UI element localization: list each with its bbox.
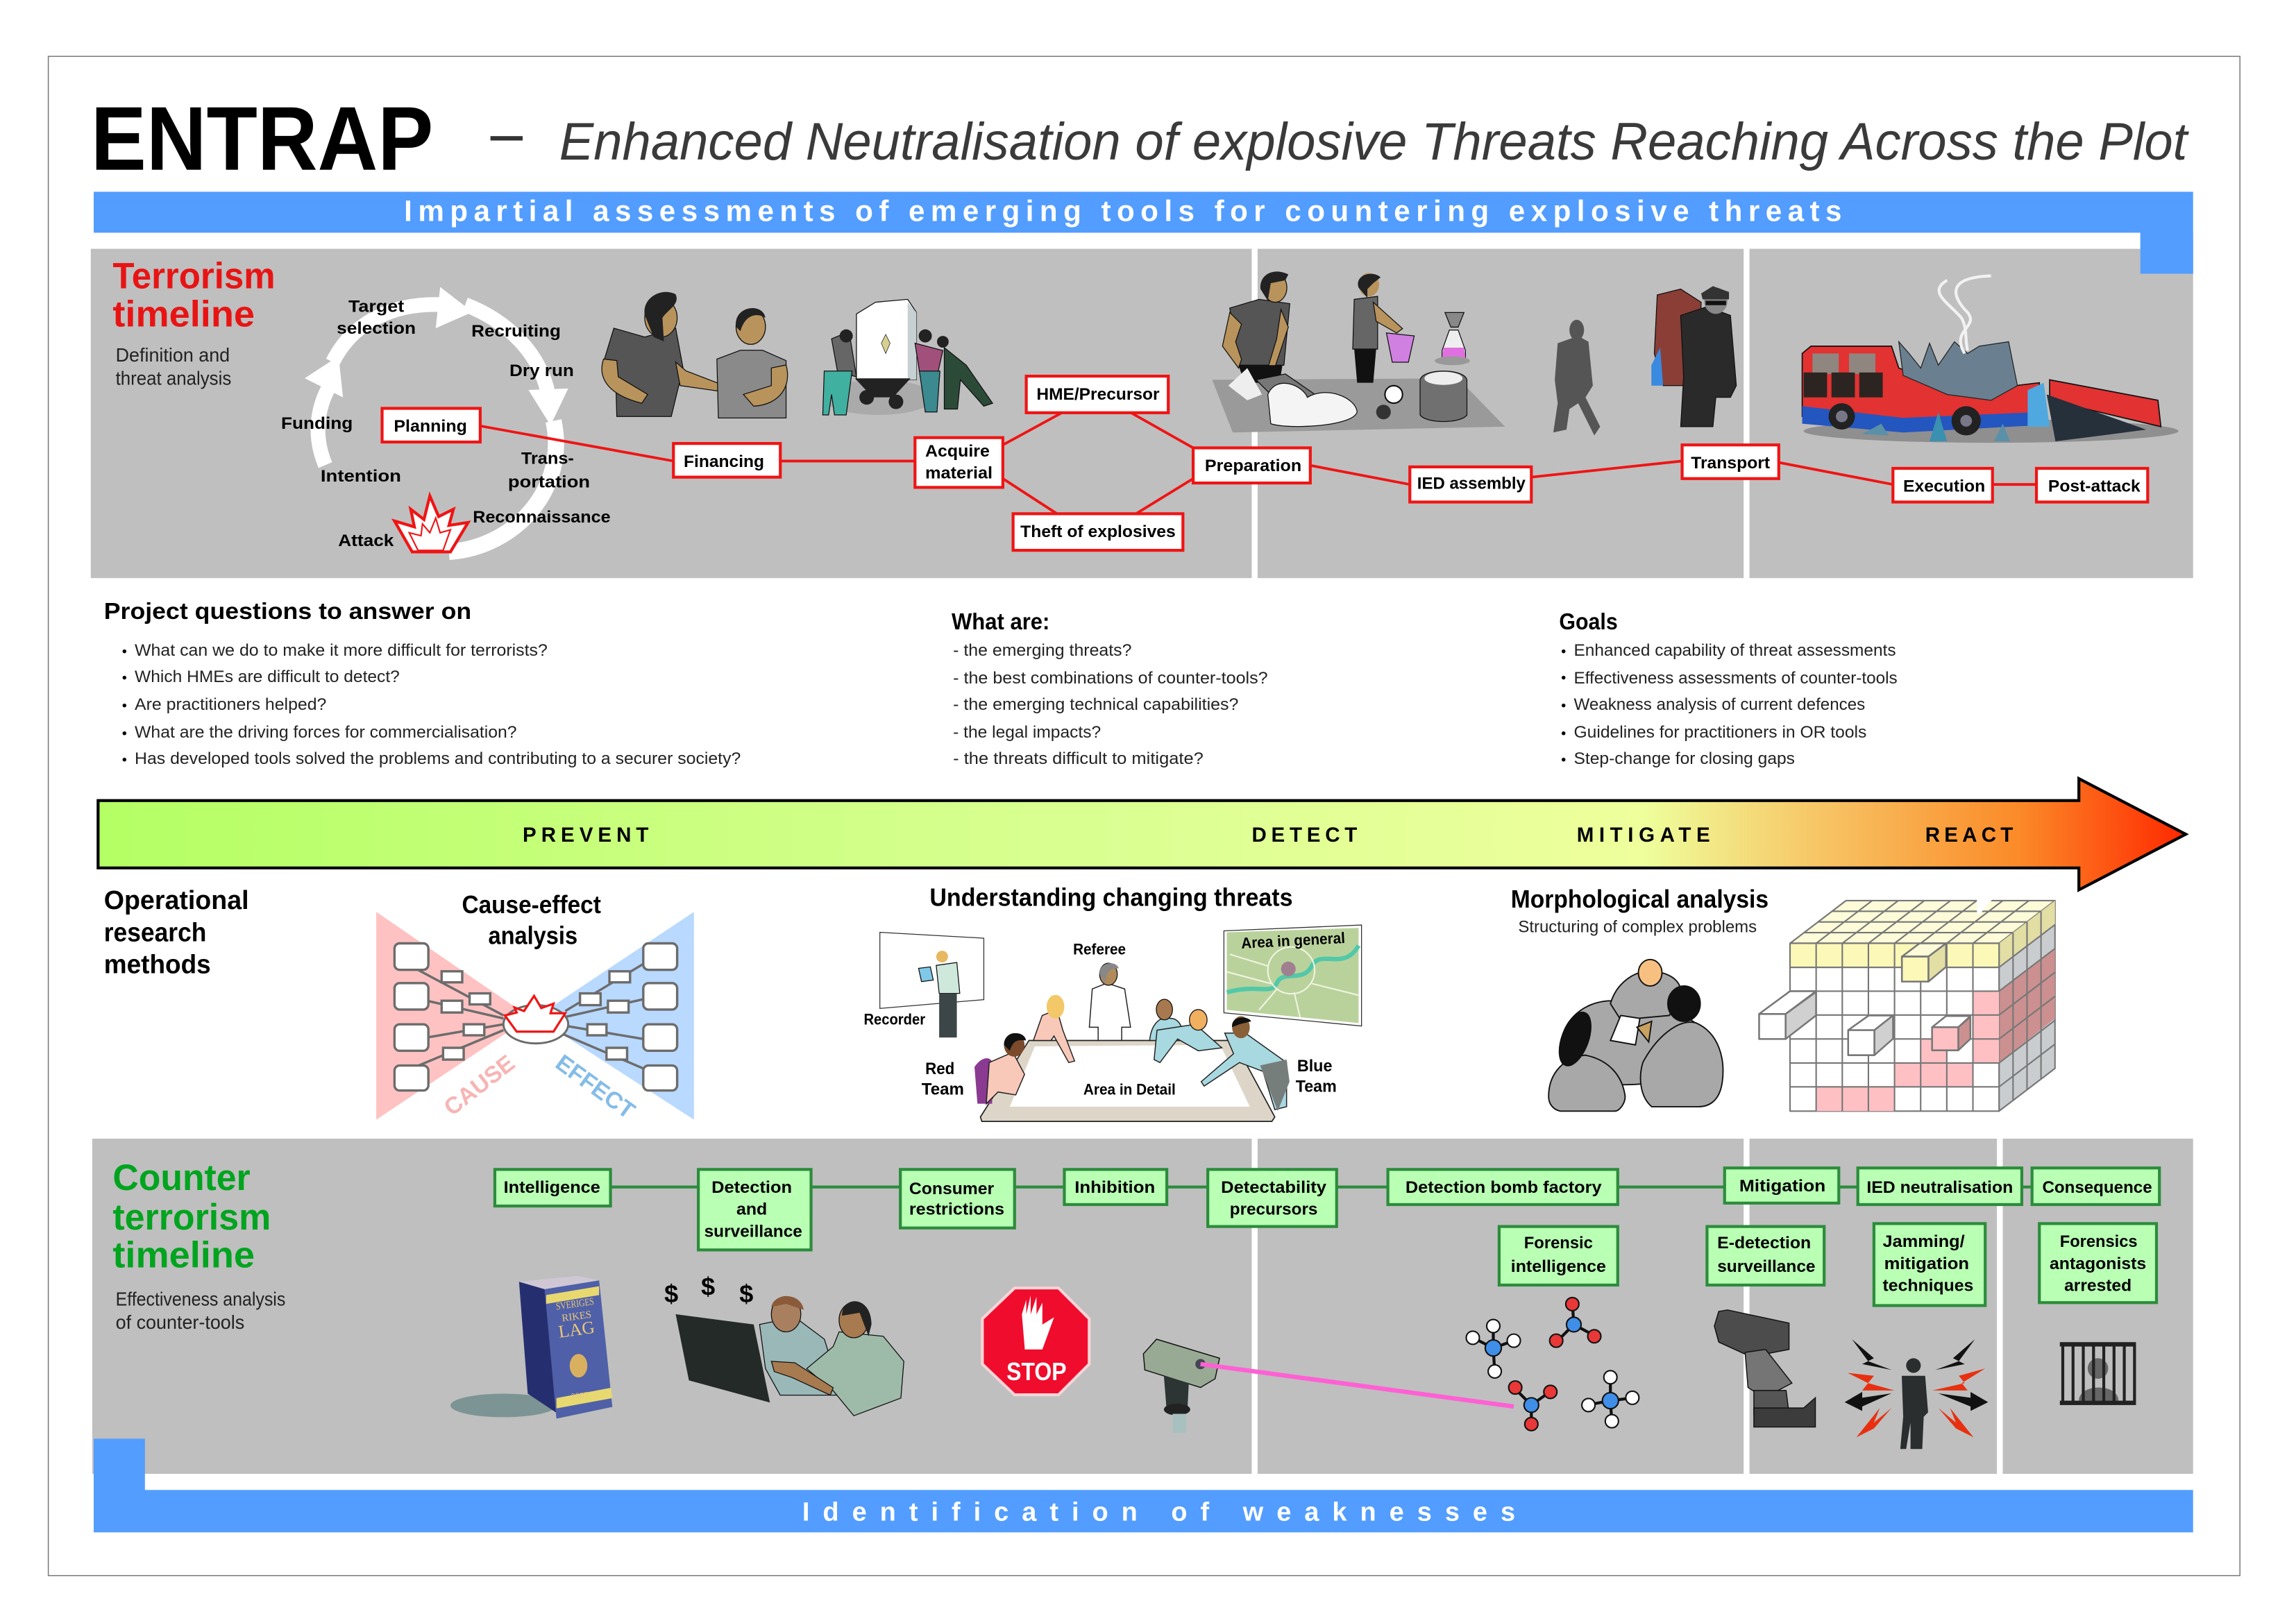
cycle labels: [281, 297, 611, 550]
heading: morphological analysis: [1511, 885, 1769, 937]
red team figures: Red: [925, 1060, 954, 1078]
box: Acquire material: material: [925, 464, 993, 483]
illustration: jamming silhouette with bolts: [1845, 1339, 1988, 1449]
heading: operational research methods: methods: [104, 951, 211, 980]
text: what are: - the emerging technical capabilities?: [953, 695, 1238, 714]
box: Jamming mitigation techniques: [1874, 1223, 1985, 1305]
box: Detection and surveillance: Detection: [711, 1178, 792, 1197]
box: Mitigation: [1725, 1168, 1839, 1203]
illustration: man with backpack: [1651, 286, 1737, 427]
cycle labels: Attack: [338, 532, 394, 550]
box: Execution: [1893, 468, 1993, 502]
cycle labels: Recruiting: [471, 322, 561, 341]
panel: counter terrorism timeline: [92, 1139, 2193, 1474]
diagram: cause-effect bowtie: [376, 891, 694, 1125]
title dash: [491, 136, 523, 140]
panel: terrorism timeline: [91, 232, 2193, 578]
text: project questions: Has developed tools solved the problems and contributing to a securer society?: [135, 749, 741, 768]
cycle labels: Intention: [321, 467, 401, 486]
heading: morphological analysis: Morphological analysis: [1511, 885, 1769, 913]
illustration: bombed bus: [1803, 276, 2179, 443]
text: project questions: What are the driving forces for commercialisation?: [135, 723, 517, 742]
text: goals: Enhanced capability of threat assessments: [1573, 641, 1896, 660]
diagram: terrorist cycle arrows: [305, 287, 568, 552]
box: Consequence: [2032, 1168, 2159, 1205]
text: what are: - the best combinations of counter-tools?: [953, 669, 1268, 688]
arrow: prevent detect mitigate react: PREVENT: [523, 824, 648, 847]
illustration: two men exchanging money: [602, 292, 788, 418]
bottom banner: Identification of weaknesses: [802, 1498, 1515, 1527]
box: IED assembly: [1410, 467, 1531, 502]
heading: counter terrorism timeline: timeline: [112, 1235, 255, 1276]
box: IED neutralisation: IED neutralisation: [1866, 1178, 2013, 1197]
blue team figures: [1149, 999, 1337, 1111]
box: Financing: Financing: [684, 452, 764, 471]
box: Forensics antagonists arrested: Forensics: [2060, 1232, 2138, 1251]
cycle labels: Funding: [281, 414, 353, 433]
box: Transport: [1682, 445, 1779, 479]
box: Mitigation: Mitigation: [1739, 1177, 1825, 1196]
text: goals: Step-change for closing gaps: [1573, 749, 1795, 768]
box: Forensic intelligence: Forensic: [1524, 1234, 1593, 1252]
illustration: men at laptop with dollars: $: [701, 1272, 715, 1300]
referee: [1073, 940, 1131, 1042]
text: project questions: Project questions to answer on: [104, 598, 471, 624]
text: project questions: What can we do to make it more difficult for terrorists?: [135, 641, 548, 660]
diagram: cause-effect bowtie: CAUSE: [439, 1050, 520, 1121]
box: Jamming mitigation techniques: Jamming/: [1883, 1232, 1965, 1251]
text: what are: - the legal impacts?: [953, 723, 1101, 742]
box: Acquire material: Acquire: [925, 442, 990, 461]
illustration: law book: SVERIGES: [555, 1296, 595, 1313]
box: Preparation: Preparation: [1205, 457, 1301, 475]
heading: terrorism timeline: [112, 256, 276, 334]
red team figures: Team: [922, 1080, 964, 1099]
box: Planning: Planning: [394, 417, 467, 436]
cycle labels: Dry run: [509, 362, 574, 380]
box: Jamming mitigation techniques: techniques: [1883, 1276, 1973, 1295]
box: E-detection surveillance: surveillance: [1717, 1257, 1816, 1276]
text: what are: What are:: [952, 609, 1049, 635]
box: HME/Precursor: HME/Precursor: [1036, 385, 1160, 404]
heading: understanding changing threats: Understanding changing threats: [929, 884, 1293, 912]
text: definition and threat analysis: Definition and: [116, 344, 230, 366]
referee: Referee: [1073, 940, 1126, 958]
illustration: bomb preparation bench: [1212, 271, 1505, 432]
box: Consequence: Consequence: [2042, 1178, 2152, 1197]
illustration: men at laptop with dollars: $: [664, 1280, 678, 1308]
illustration: men at laptop with dollars: [664, 1272, 904, 1416]
heading: counter terrorism timeline: terrorism: [112, 1197, 271, 1238]
cycle labels: Target: [348, 297, 404, 316]
box: Detection and surveillance: and: [736, 1200, 767, 1219]
illustration: men at laptop with dollars: $: [739, 1280, 753, 1308]
blue team figures: Blue: [1297, 1057, 1332, 1076]
box: Transport: Transport: [1691, 454, 1770, 473]
text: definition and threat analysis: threat analysis: [116, 368, 231, 389]
blue team figures: Team: [1296, 1078, 1337, 1096]
text: effectiveness analysis: [116, 1288, 285, 1333]
box: Consumer restrictions: Consumer: [909, 1180, 995, 1198]
box: Jamming mitigation techniques: mitigation: [1884, 1255, 1969, 1273]
text: goals: Weakness analysis of current defences: [1573, 695, 1865, 714]
illustration: law book: RIKES: [562, 1309, 592, 1325]
box: Detection bomb factory: [1388, 1169, 1618, 1205]
box: Detection and surveillance: surveillance: [704, 1222, 802, 1241]
heading: counter terrorism timeline: Counter: [112, 1157, 251, 1198]
icon: explosion: [394, 496, 468, 552]
illustration: law book: LAG: [557, 1317, 596, 1342]
heading: operational research methods: Operational: [104, 886, 249, 915]
box: IED assembly: IED assembly: [1417, 475, 1526, 493]
table: area in detail: Area in Detail: [1083, 1081, 1176, 1098]
text: project questions: Are practitioners helped?: [135, 695, 326, 714]
text: what are: - the threats difficult to mitigate?: [953, 749, 1204, 768]
box: Planning: [382, 408, 480, 442]
illustration: molecules: [1466, 1298, 1639, 1431]
box: Intelligence: Intelligence: [504, 1178, 600, 1197]
cycle labels: Trans-: [521, 450, 574, 468]
box: Consumer restrictions: restrictions: [909, 1200, 1004, 1219]
box: Intelligence: [495, 1169, 611, 1206]
red connector lines: [480, 410, 2036, 513]
green connector line: [611, 1186, 2032, 1189]
text: goals: Guidelines for practitioners in OR tools: [1573, 723, 1866, 742]
box: Inhibition: [1064, 1169, 1167, 1205]
box: Consumer restrictions: [900, 1169, 1015, 1228]
icon: stop sign: STOP: [1006, 1358, 1067, 1386]
top banner: [94, 192, 2193, 273]
box: Forensics antagonists arrested: antagonists: [2050, 1255, 2146, 1273]
box: E-detection surveillance: [1707, 1227, 1824, 1285]
icon: stop sign: [982, 1288, 1089, 1395]
text: what are: - the emerging threats?: [953, 641, 1131, 660]
text: what are: [952, 609, 1268, 768]
box: Acquire material: [915, 438, 1003, 487]
top banner: Impartial assessments of emerging tools for countering explosive threats: [404, 195, 1841, 228]
illustration: surveillance camera: [1714, 1310, 1816, 1427]
text: goals: Goals: [1559, 609, 1618, 635]
text: goals: [1559, 609, 1898, 768]
box: Preparation: [1193, 448, 1310, 483]
cycle labels: Reconnaissance: [473, 508, 611, 527]
box: IED neutralisation: [1858, 1168, 2022, 1205]
box: Forensic intelligence: [1499, 1227, 1618, 1285]
heading: operational research methods: [104, 886, 249, 980]
box: Theft of explosives: Theft of explosives: [1020, 522, 1176, 541]
title: ENTRAP: ENTRAP: [91, 88, 433, 189]
box: HME/Precursor: [1027, 376, 1168, 413]
subtitle: Enhanced Neutralisation of explosive Threats Reaching Across the Plot: [559, 112, 2189, 171]
diagram: cause-effect bowtie: Cause-effect: [462, 891, 601, 919]
arrow: prevent detect mitigate react: DETECT: [1251, 824, 1357, 847]
diagram: cause-effect bowtie: analysis: [488, 921, 577, 949]
box: Forensics antagonists arrested: arrested: [2064, 1276, 2132, 1295]
illustration: group working around table: [1548, 960, 1723, 1111]
box: E-detection surveillance: E-detection: [1717, 1234, 1811, 1252]
table: area in detail: [981, 1040, 1275, 1121]
diagram: morphological cube: [1759, 899, 2055, 1111]
box: Post-attack: [2036, 468, 2147, 502]
map: area in general: Area in general: [1241, 929, 1345, 952]
illustration: cart with machine: [822, 299, 993, 415]
box: Post-attack: Post-attack: [2048, 477, 2141, 496]
diagram: cause-effect bowtie: EFFECT: [550, 1050, 640, 1125]
text: project questions: [104, 598, 741, 768]
box: Forensics antagonists arrested: [2039, 1223, 2156, 1302]
text: effectiveness analysis: of counter-tools: [116, 1311, 244, 1333]
icon: prisoner behind bars: [2060, 1342, 2136, 1405]
text: project questions: Which HMEs are difficult to detect?: [135, 668, 400, 686]
bottom banner: [94, 1438, 2193, 1532]
illustration: walking silhouette: [1553, 320, 1600, 436]
box: Detection and surveillance: [698, 1169, 811, 1250]
red team figures: [922, 995, 1074, 1104]
text: goals: Effectiveness assessments of counter-tools: [1573, 669, 1898, 688]
box: Execution: Execution: [1903, 477, 1985, 496]
heading: terrorism timeline: Terrorism: [112, 256, 276, 297]
arrow: prevent detect mitigate react: REACT: [1925, 824, 2013, 847]
box: Detection bomb factory: Detection bomb factory: [1406, 1178, 1602, 1197]
box: Financing: [673, 443, 780, 477]
illustration: sensor camera with laser: [1143, 1339, 1514, 1433]
box: Theft of explosives: [1013, 513, 1183, 550]
map: area in general: [1224, 925, 1362, 1026]
arrow: prevent detect mitigate react: [98, 779, 2186, 890]
cycle labels: selection: [337, 319, 416, 338]
recorder: [863, 933, 984, 1037]
illustration: law book: [450, 1276, 612, 1419]
text: effectiveness analysis: Effectiveness analysis: [116, 1288, 285, 1309]
heading: morphological analysis: Structuring of complex problems: [1518, 918, 1757, 937]
arrow: prevent detect mitigate react: MITIGATE: [1577, 824, 1710, 847]
heading: counter terrorism timeline: [112, 1157, 271, 1276]
box: Detectability precursors: Detectability: [1221, 1178, 1327, 1197]
box: Detectability precursors: [1208, 1169, 1337, 1227]
cycle labels: portation: [508, 473, 590, 491]
box: Inhibition: Inhibition: [1074, 1178, 1155, 1197]
box: Detectability precursors: precursors: [1230, 1200, 1317, 1219]
illustration: red and blue team wargame: [863, 925, 1362, 1121]
illustration: law book: 2007: [571, 1390, 589, 1402]
heading: operational research methods: research: [104, 918, 206, 947]
recorder: Recorder: [863, 1011, 925, 1028]
heading: terrorism timeline: timeline: [112, 294, 255, 334]
box: Forensic intelligence: intelligence: [1511, 1257, 1606, 1276]
text: definition and threat analysis: [116, 344, 231, 389]
